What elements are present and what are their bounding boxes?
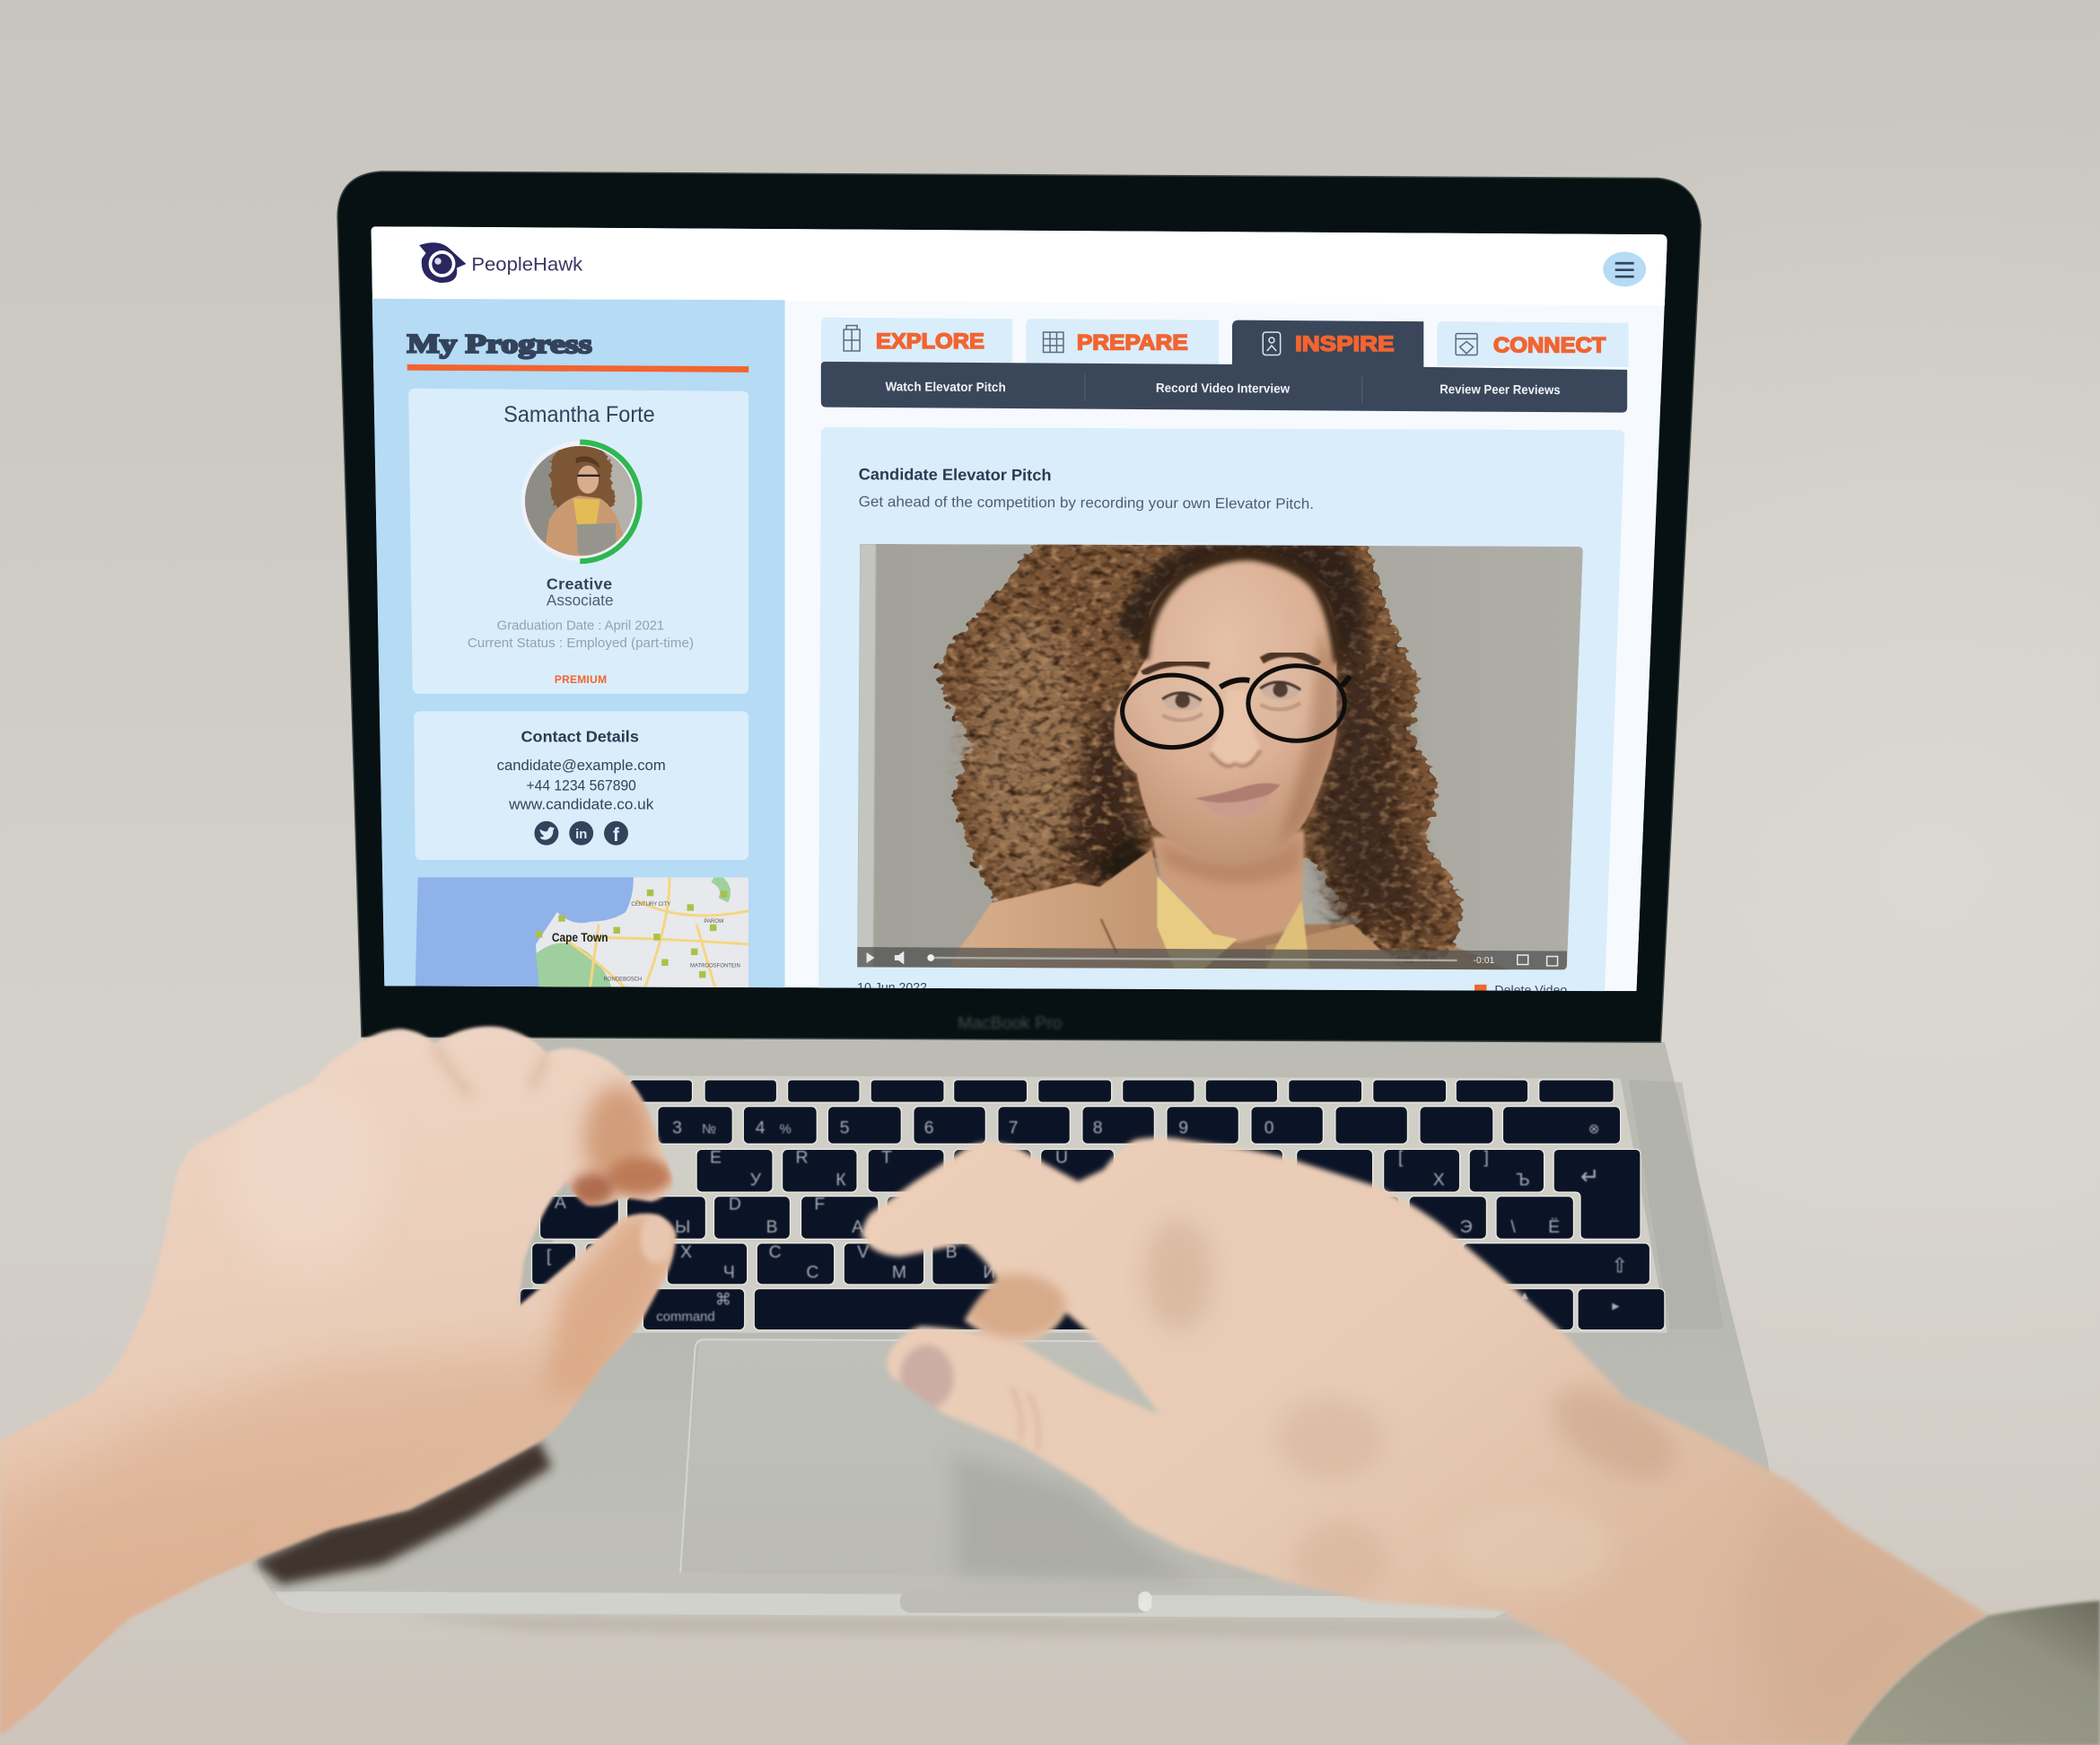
key legends: U [1055, 1147, 1068, 1167]
scrubber [931, 958, 1457, 960]
video player [857, 533, 1583, 972]
icon: linkedin: in [575, 827, 587, 842]
key legends: ↵ [1580, 1164, 1599, 1189]
right eye [1260, 682, 1300, 710]
contact card [414, 711, 748, 860]
opening notch [900, 1590, 1151, 1613]
key legends [547, 1118, 1628, 1324]
nose [1211, 690, 1260, 767]
key legends: [ [1398, 1147, 1404, 1167]
icon: explore [844, 326, 860, 351]
header bar [371, 226, 1667, 305]
record video interview: Record Video Interview [1156, 381, 1291, 397]
description: Get ahead of the competition by recording your own Elevator Pitch. [859, 494, 1314, 513]
laptop shadow on desk [402, 1616, 1580, 1640]
screen background [371, 226, 1667, 991]
key legends: 4 [756, 1118, 766, 1137]
right hand shading [900, 1219, 1996, 1745]
label: PREPARE [1077, 330, 1188, 355]
right hand [862, 1137, 1996, 1745]
volume icon [895, 951, 904, 964]
key legends: № [702, 1121, 716, 1136]
map label: Rondebosch: RONDEBOSCH [604, 977, 642, 982]
key legends: 0 [1264, 1118, 1274, 1137]
icon: delete [1474, 985, 1486, 996]
laptop screen [371, 226, 1667, 998]
left eye [1162, 693, 1203, 720]
key legends: Х [1433, 1171, 1445, 1190]
key legends: E [710, 1147, 722, 1167]
portrait: dark crown of hair [1112, 547, 1369, 656]
portrait: chin shadow [1159, 837, 1302, 884]
key legends: К [836, 1171, 846, 1190]
portrait: hair [938, 533, 1463, 961]
icon: facebook: f [613, 825, 619, 846]
right brow [1262, 653, 1319, 664]
website: www.candidate.co.uk [508, 796, 654, 812]
portrait: jacket [949, 849, 1406, 972]
logo [419, 242, 582, 283]
portrait: face [1114, 556, 1338, 864]
key legends: B [946, 1242, 958, 1262]
current status: Current Status : Employed (part-time) [468, 636, 694, 651]
logo eye mark [419, 242, 466, 283]
icon: connect [1456, 334, 1477, 355]
laptop base deck [258, 1037, 1781, 1618]
key legends: У [750, 1171, 762, 1190]
key legends: X [680, 1242, 692, 1262]
key legends: R [795, 1147, 808, 1167]
key legends: 3 [672, 1118, 682, 1137]
logo wordmark: PeopleHawk [471, 252, 582, 275]
MacBook Pro label: MacBook Pro [958, 1013, 1062, 1033]
key legends: Ъ [1516, 1171, 1530, 1190]
play icon [867, 952, 875, 963]
map label: Cape Town: Cape Town [552, 931, 608, 945]
key legends: Ч [723, 1263, 735, 1283]
key legends: 6 [924, 1118, 934, 1137]
portrait: shirt [1157, 876, 1310, 972]
job title: Creative [547, 575, 612, 593]
key legends: C [769, 1242, 782, 1262]
icon: twitter [534, 821, 558, 846]
portrait: jacket behind hair [1151, 925, 1513, 972]
left hand [0, 1026, 683, 1736]
sleeve [1845, 1600, 2100, 1745]
heading: Candidate Elevator Pitch [859, 465, 1052, 484]
panel: elevator pitch [818, 427, 1624, 998]
key legends: С [806, 1263, 818, 1283]
video backdrop [857, 544, 1583, 969]
key legends: T [881, 1147, 892, 1167]
email: candidate@example.com [497, 758, 666, 774]
key legends: ► [1610, 1299, 1622, 1312]
graduation date: Graduation Date : April 2021 [497, 618, 664, 633]
right hand soft shadow on trackpad [952, 1453, 1205, 1583]
key legends: \ [1510, 1217, 1516, 1237]
video controls [857, 947, 1567, 972]
key legends: В [766, 1217, 778, 1237]
icon: linkedin [569, 821, 593, 846]
key legends: A [555, 1193, 566, 1213]
tab: Explore [821, 318, 1012, 363]
orange underline [407, 364, 748, 373]
keyboard [512, 1075, 1667, 1333]
key legends: ⇧ [1611, 1255, 1628, 1277]
key legends: command [656, 1309, 715, 1324]
portrait: dark hair right of face [1310, 656, 1406, 911]
heading: My Progress: My Progress [407, 329, 592, 359]
key legends: 5 [840, 1118, 849, 1137]
key legends: ] [1484, 1147, 1489, 1167]
tab: Inspire active [1232, 320, 1423, 370]
trackpad [680, 1339, 1420, 1581]
panel: sidebar [371, 299, 785, 998]
job level: Associate [547, 592, 614, 609]
laptop lid [337, 171, 1701, 1042]
speaker grille [1629, 1080, 1724, 1328]
map label: Parow: PAROW [704, 919, 724, 925]
key legends: 9 [1178, 1118, 1188, 1137]
key legends: Э [1460, 1217, 1473, 1237]
label: INSPIRE [1295, 332, 1395, 356]
portrait: glasses [1123, 666, 1350, 748]
tab: Connect [1437, 321, 1629, 367]
map label: Matroosfontein: MATROOSFONTEIN [690, 963, 740, 969]
phone: +44 1234 567890 [527, 777, 636, 794]
fullscreen icons [1518, 955, 1558, 966]
key legends: 8 [1093, 1118, 1103, 1137]
map label: Century City: CENTURY CITY [631, 902, 670, 908]
left hand shading [0, 1043, 683, 1736]
front lip of the base [275, 1592, 1540, 1618]
contact heading: Contact Details [521, 728, 639, 746]
map [416, 877, 750, 993]
menu button [1603, 252, 1646, 286]
icon: inspire [1263, 332, 1281, 355]
key legends: А [852, 1217, 863, 1237]
key legends: % [780, 1121, 792, 1136]
key legends: V [857, 1242, 869, 1262]
portrait: dark shadow behind neck [1096, 828, 1159, 884]
label: CONNECT [1493, 333, 1606, 357]
left brow [1142, 662, 1210, 674]
key legends: ▲ [1518, 1289, 1531, 1302]
video date: 10 Jun 2022 [857, 980, 927, 995]
candidate name: Samantha Forte [503, 403, 655, 427]
label: EXPLORE [876, 329, 984, 354]
portrait: neck [1151, 830, 1305, 943]
tab: Prepare [1026, 319, 1219, 364]
key legends: И [983, 1263, 995, 1283]
key legends: D [729, 1195, 741, 1214]
lips [1194, 784, 1281, 817]
key legends: Ё [1548, 1217, 1560, 1237]
hairline shadow [1143, 556, 1338, 663]
sub navigation bar [821, 362, 1627, 413]
premium badge: PREMIUM [555, 673, 607, 686]
delete video link: Delete Video [1494, 983, 1567, 997]
time: -0:01 [1474, 956, 1495, 966]
review peer reviews: Review Peer Reviews [1439, 382, 1561, 398]
key legends: М [892, 1263, 906, 1283]
key legends: ⌘ [715, 1290, 731, 1308]
key legends: Ы [675, 1217, 690, 1237]
key legends: ⊗ [1588, 1121, 1599, 1136]
icon: facebook [604, 821, 628, 846]
profile card [408, 389, 748, 694]
key legends: [ [547, 1247, 552, 1267]
hand shadow on deck [255, 1440, 552, 1584]
key legends: 7 [1009, 1118, 1019, 1137]
right cheek shadow [1279, 629, 1336, 844]
avatar with progress ring [521, 441, 643, 568]
icon: prepare [1044, 332, 1063, 352]
key legends: F [814, 1195, 825, 1214]
watch elevator pitch: Watch Elevator Pitch [885, 380, 1006, 395]
